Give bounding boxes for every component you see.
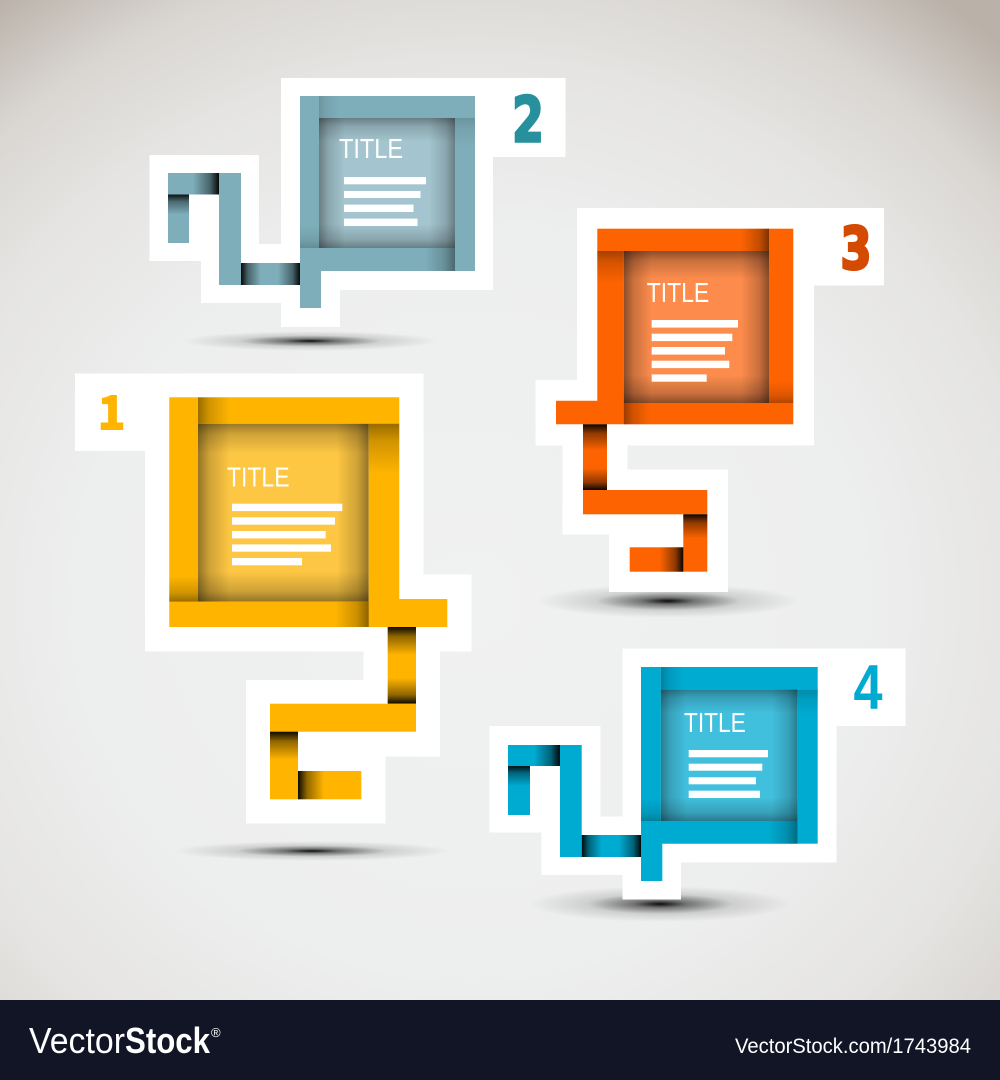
title 1: TITLE bbox=[227, 461, 290, 492]
white paper backing 4 bbox=[490, 648, 906, 900]
inner square 2 bbox=[319, 118, 455, 248]
connector ribbon 2 bbox=[168, 173, 300, 285]
frame bands 2 bbox=[300, 96, 475, 308]
white paper backing 2 bbox=[150, 78, 566, 327]
text lines 2 bbox=[344, 177, 426, 226]
footer logo: Vector bbox=[29, 1020, 125, 1061]
inner square 4 bbox=[661, 689, 798, 821]
footer logo: ® bbox=[211, 1025, 221, 1040]
white paper backing 3 bbox=[536, 208, 884, 592]
number 3: 3 bbox=[840, 214, 872, 282]
title 4: TITLE bbox=[684, 707, 746, 738]
footer bar bbox=[0, 1000, 1000, 1080]
text lines 3 bbox=[652, 320, 738, 382]
footer logo bbox=[29, 1020, 221, 1061]
panel 4: blue step bbox=[490, 648, 906, 900]
frame bands 4 bbox=[641, 667, 818, 881]
shadow under panel 2 bbox=[182, 331, 438, 351]
shadow under panel 4 bbox=[528, 886, 792, 922]
footer image id: VectorStock.com/1743984 bbox=[735, 1035, 971, 1058]
frame bands 1 bbox=[169, 397, 447, 627]
title 2: TITLE bbox=[339, 133, 403, 164]
white paper backing 1 bbox=[75, 374, 472, 824]
inner square 3 bbox=[624, 251, 769, 403]
connector ribbon 4 bbox=[508, 745, 641, 857]
footer logo: Stock bbox=[125, 1020, 211, 1061]
text lines 1 bbox=[232, 504, 342, 565]
inner square 1 bbox=[198, 424, 369, 602]
shadow under panel 1 bbox=[174, 841, 450, 861]
frame bands 3 bbox=[556, 229, 793, 424]
number 2: 2 bbox=[512, 84, 544, 156]
panel 3: orange step bbox=[536, 208, 884, 592]
panel 1: yellow step bbox=[75, 374, 472, 824]
connector ribbon 1 bbox=[270, 627, 416, 799]
connector ribbon 3 bbox=[583, 424, 707, 572]
title 3: TITLE bbox=[647, 277, 709, 308]
number 1: 1 bbox=[98, 377, 125, 443]
shadow under panel 3 bbox=[536, 584, 800, 618]
number 4: 4 bbox=[854, 653, 882, 723]
text lines 4 bbox=[689, 750, 768, 798]
panel 2: grey-teal step bbox=[150, 78, 566, 327]
